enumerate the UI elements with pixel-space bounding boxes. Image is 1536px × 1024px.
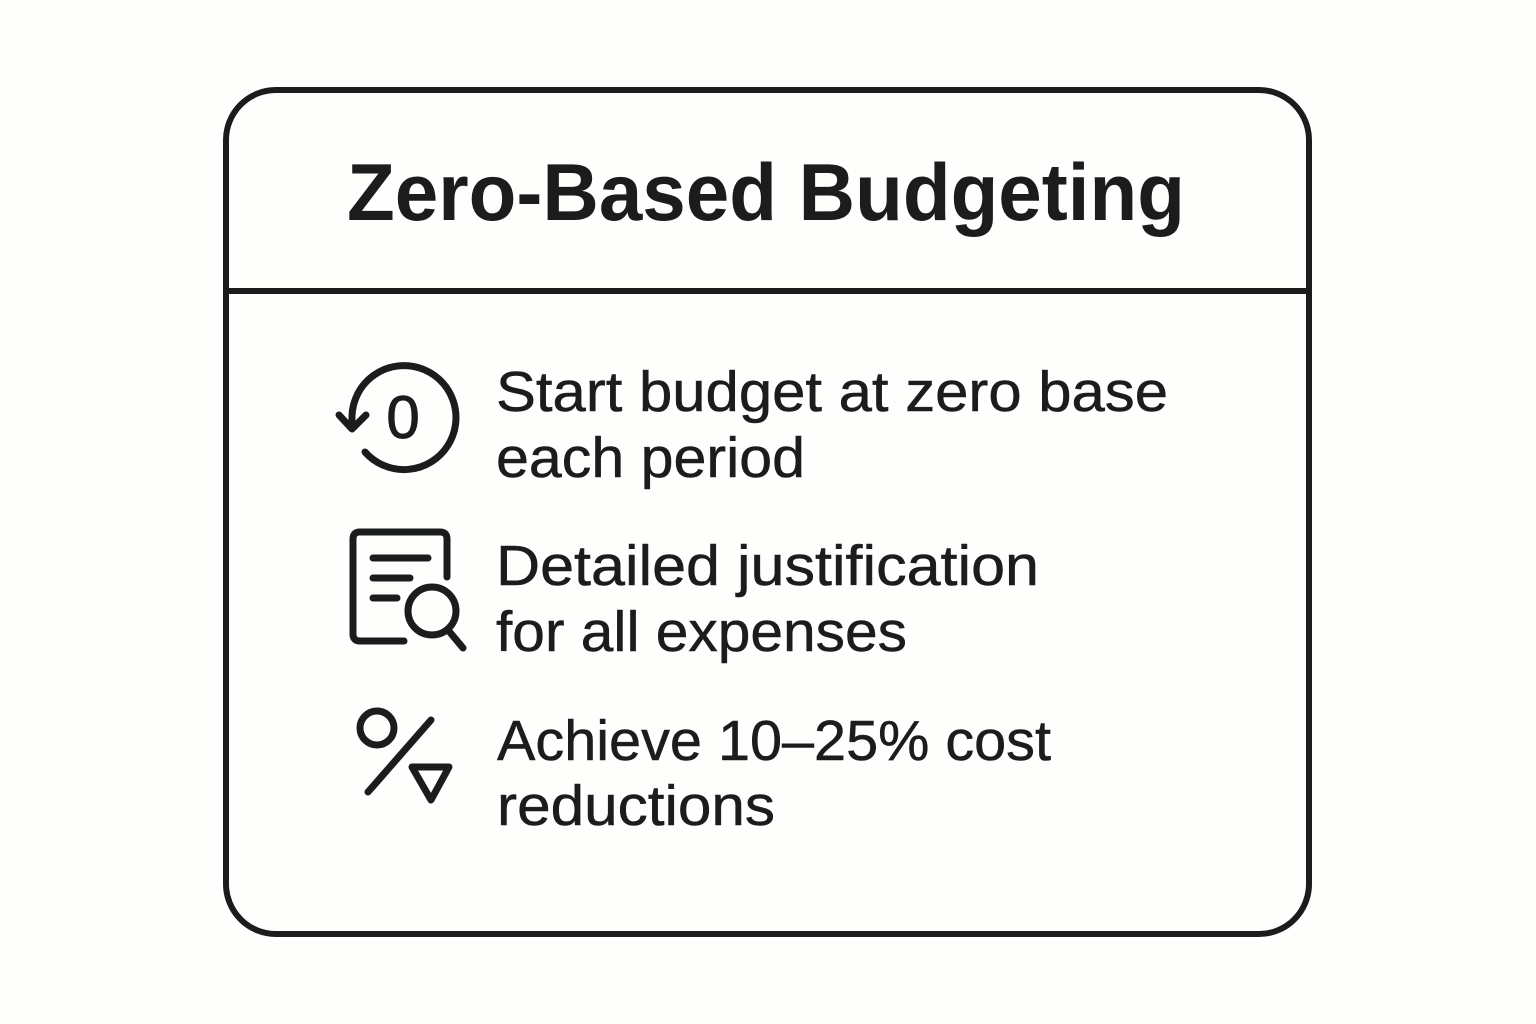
- text: start budget at zero base: Start budget at zero base: [496, 360, 1168, 424]
- item: cost reductions: [360, 709, 1051, 838]
- text: achieve 10-25% cost reductions: reductions: [497, 774, 775, 838]
- icon: circular arrow with zero: 0: [386, 384, 420, 451]
- item: start at zero: [339, 360, 1168, 490]
- panel: card outline: [226, 90, 1309, 934]
- text: achieve 10-25% cost reductions: Achieve 10–25% cost: [497, 709, 1051, 773]
- icon: percent with down triangle: [360, 711, 449, 800]
- title: Zero-Based Budgeting: [347, 148, 1185, 238]
- text: start budget at zero base: each period: [496, 426, 805, 490]
- icon: document with magnifier: [353, 532, 463, 648]
- item: detailed justification: [353, 532, 1039, 664]
- text: detailed justification for all expenses: for all expenses: [496, 600, 907, 664]
- text: detailed justification for all expenses: Detailed justification: [496, 534, 1039, 598]
- icon: circular arrow with zero: [339, 366, 456, 470]
